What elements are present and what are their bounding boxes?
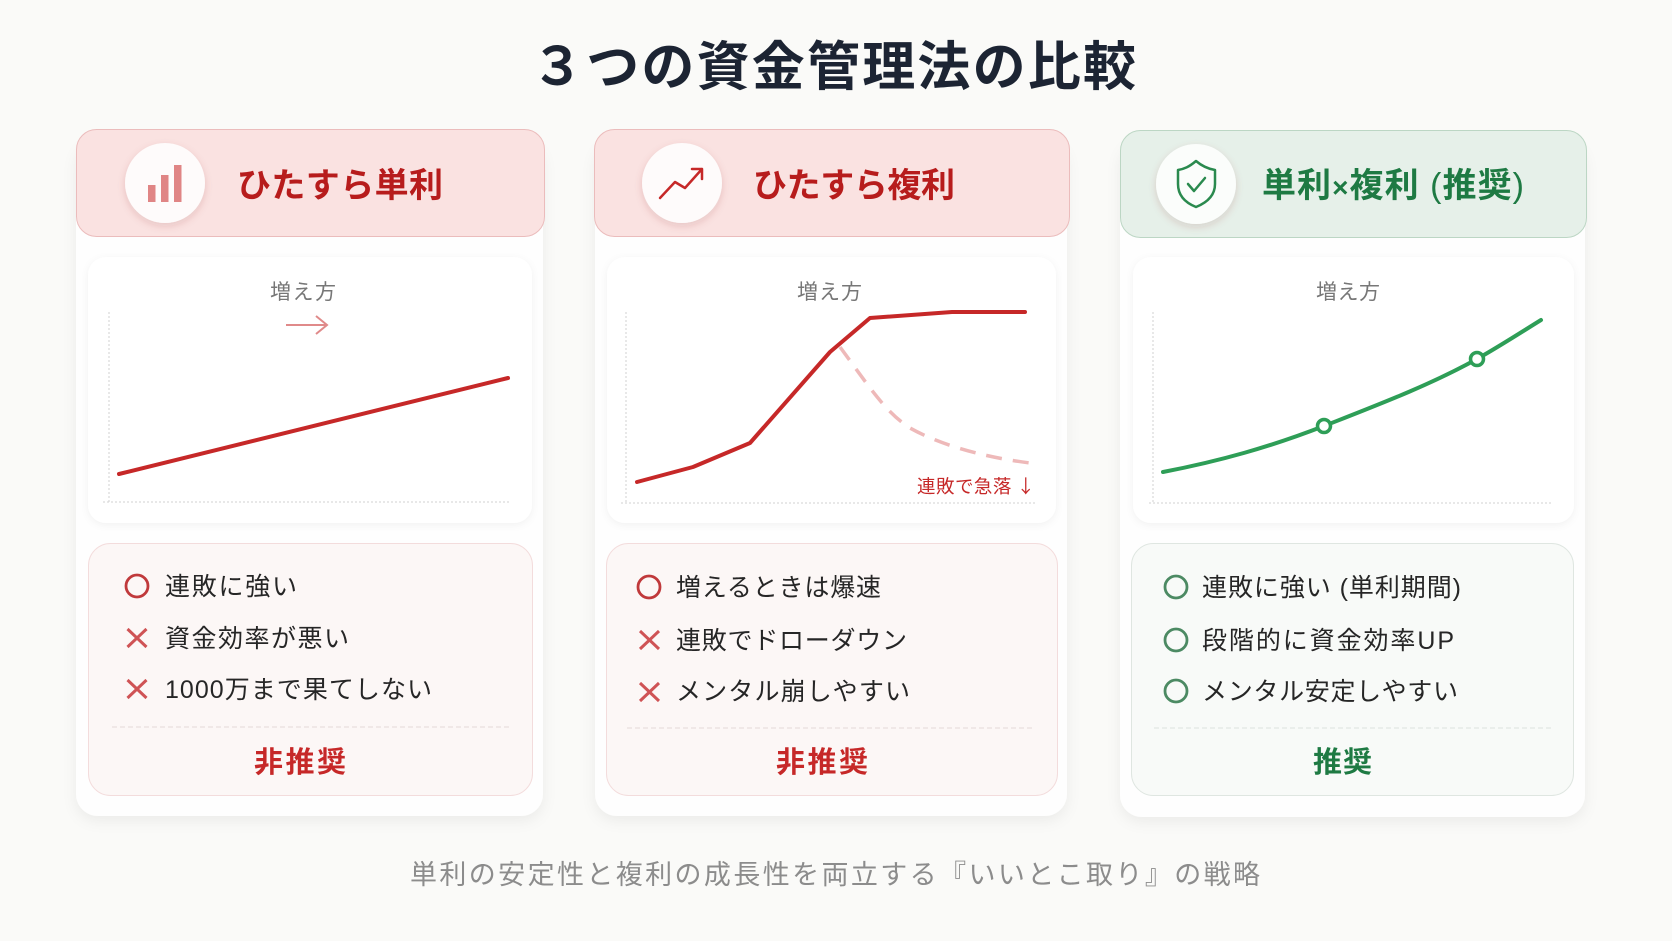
panel: ひたすら単利 xyxy=(76,130,544,816)
pros and cons: ひたすら複利: 連敗でドローダウン xyxy=(676,627,907,655)
header: ひたすら単利 xyxy=(76,130,544,236)
pros and cons: 単利×複利: 推奨 xyxy=(1313,746,1372,779)
pros and cons: ひたすら単利: 資金効率が悪い xyxy=(165,625,349,653)
pros and cons: 単利×複利: 連敗に強い (単利期間) xyxy=(1202,574,1461,602)
pros and cons: ひたすら複利: 非推奨 xyxy=(776,746,868,779)
icon: rising arrow xyxy=(660,169,702,198)
pros and cons: ひたすら単利 xyxy=(88,544,532,796)
title: ３つの資金管理法の比較 xyxy=(531,38,1136,97)
pros and cons: ひたすら複利: メンタル崩しやすい xyxy=(676,678,910,706)
chart: linear growth: 増え方 xyxy=(270,281,336,304)
pros and cons: ひたすら複利 xyxy=(606,544,1058,796)
header: ひたすら複利: ひたすら複利 xyxy=(753,167,955,205)
header: ひたすら単利: ひたすら単利 xyxy=(237,167,443,205)
header: 単利×複利 (推奨) xyxy=(1120,130,1586,238)
pros and cons: ひたすら複利: 増えるときは爆速 xyxy=(676,574,881,602)
pros and cons: 単利×複利: 段階的に資金効率UP xyxy=(1202,627,1454,655)
icon: shield check xyxy=(1178,161,1215,207)
header: 単利×複利 (推奨): 単利×複利 (推奨) xyxy=(1262,167,1524,205)
chart: compound growth with sharp drop: 連敗で急落 ↓ xyxy=(917,473,1035,499)
chart: compound growth with sharp drop xyxy=(607,257,1056,523)
pros and cons: 単利×複利 xyxy=(1132,544,1574,796)
pros and cons: ひたすら単利: 1000万まで果てしない xyxy=(165,676,432,704)
icon: bar chart xyxy=(148,165,182,202)
footer summary: 単利の安定性と複利の成長性を両立する『いいとこ取り』の戦略 xyxy=(410,860,1260,890)
chart: staged growth xyxy=(1133,257,1574,523)
pros and cons: ひたすら単利: 連敗に強い xyxy=(165,573,297,601)
pros and cons: ひたすら単利: 非推奨 xyxy=(254,746,346,779)
panel: ひたすら複利 xyxy=(594,130,1070,816)
chart: staged growth: 増え方 xyxy=(1316,281,1380,304)
chart: linear growth xyxy=(88,257,532,523)
chart: compound growth with sharp drop: 増え方 xyxy=(797,281,862,304)
panel: 単利×複利 (推奨) xyxy=(1120,130,1586,817)
pros and cons: 単利×複利: メンタル安定しやすい xyxy=(1202,678,1458,706)
header: ひたすら複利 xyxy=(594,130,1070,236)
